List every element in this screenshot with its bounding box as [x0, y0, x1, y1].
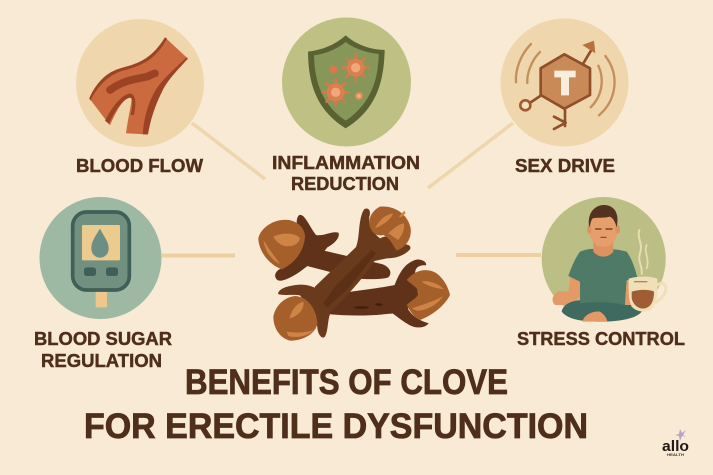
icon: blood vessel: [89, 37, 188, 134]
clove: diagonal: [273, 206, 411, 341]
title: FOR ERECTILE DYSFUNCTION: [84, 407, 588, 446]
label: inflammation reduction: REDUCTION: [291, 174, 399, 194]
label: blood sugar regulation: BLOOD SUGAR: [34, 329, 172, 349]
icon: glucose meter: [73, 212, 129, 307]
circle: stress control: [542, 197, 666, 321]
circle: inflammation: [282, 18, 411, 146]
icon: meditating man with tea: [553, 205, 666, 322]
clove: lower right: [325, 260, 450, 327]
circle: blood sugar: [40, 197, 162, 319]
label: blood flow: BLOOD FLOW: [76, 156, 203, 176]
label: sex drive: SEX DRIVE: [515, 156, 615, 176]
circle: blood flow: [76, 19, 204, 147]
logo: allo health: allo: [662, 438, 689, 455]
logo: allo health: [662, 429, 689, 457]
icon: shield with germs: [308, 35, 385, 128]
connector: stress to centre: [456, 253, 541, 257]
circle: sex drive: [500, 18, 628, 146]
label: blood sugar regulation: REGULATION: [41, 351, 162, 371]
connector: blood flow to centre: [192, 123, 265, 179]
panel: sex drive: [500, 18, 628, 176]
panel: blood flow: [76, 19, 204, 176]
logo: allo health: HEALTH: [667, 452, 684, 457]
connector: blood sugar to centre: [162, 254, 235, 258]
panel: blood sugar regulation: [34, 197, 177, 371]
panel: stress control: [517, 197, 685, 349]
label: stress control: STRESS CONTROL: [517, 329, 685, 349]
clove: upper left: [258, 215, 390, 281]
label: inflammation reduction: INFLAMMATION: [272, 153, 420, 173]
icon: testosterone hexagon: [516, 41, 615, 129]
panel: inflammation reduction: [272, 18, 425, 194]
illustration: cloves: [258, 206, 450, 341]
connector: sex drive to centre: [428, 123, 513, 188]
germ large lower: [322, 79, 349, 106]
title: BENEFITS OF CLOVE: [185, 363, 508, 402]
germ large upper: [342, 54, 369, 81]
